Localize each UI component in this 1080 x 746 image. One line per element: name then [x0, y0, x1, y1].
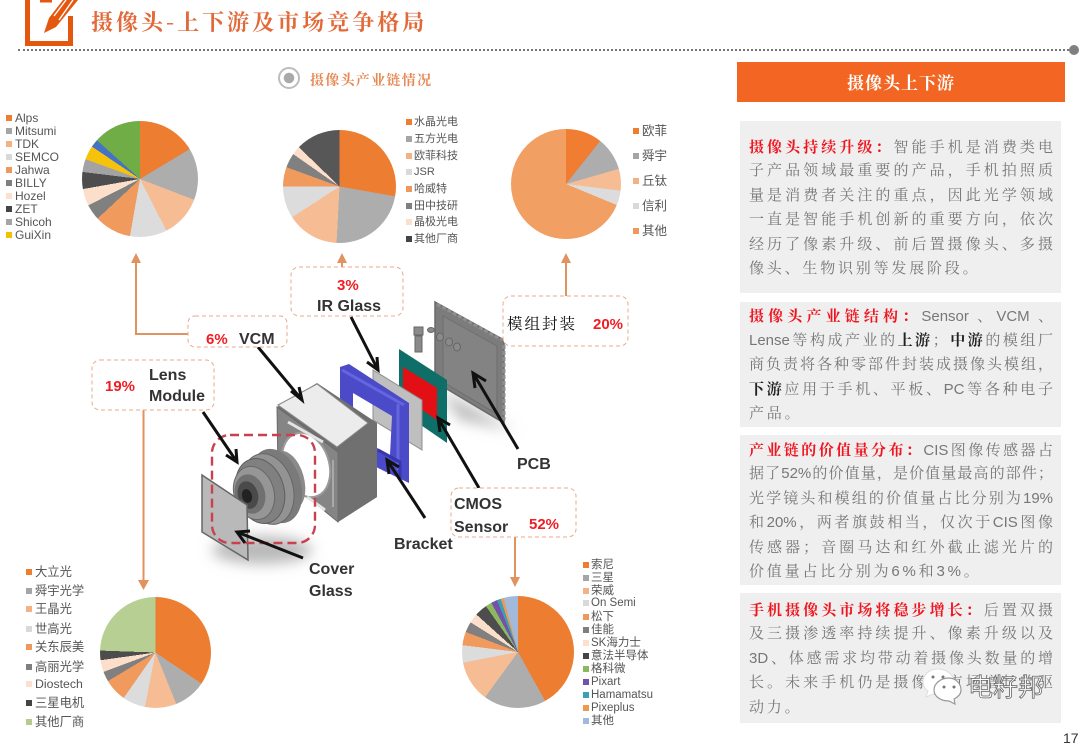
legend: VCM vendors: Mitsumi [15, 124, 56, 138]
legend: VCM vendors: Shicoh [15, 215, 52, 229]
legend: lens vendors: 关东辰美 [35, 640, 84, 654]
bracket [340, 364, 409, 483]
text panel: market growth: 3D、体感需求均带动着摄像头数量的增 [749, 650, 1053, 667]
watermark: brand name: 电籽邦 [968, 668, 1043, 704]
legend: CMOS vendors: 佳能 [591, 624, 614, 636]
callout: CMOS Sensor 52% [451, 488, 576, 537]
legend: lens vendors: 大立光 [35, 565, 72, 579]
text panel: market growth: 长。未来手机仍是摄像头市场增长的驱 [749, 674, 1053, 691]
page number: 17 [1063, 730, 1079, 746]
text panel: camera upgrades: 像头、生物识别等发展阶段。 [749, 260, 980, 277]
label: Cover Glass [309, 561, 354, 600]
pie chart: lens vendors [100, 597, 211, 708]
IR glass filter [373, 370, 422, 450]
small sensor components [414, 327, 460, 352]
legend: CMOS vendors: 松下 [591, 611, 614, 623]
legend: IR glass vendors: 晶极光电 [414, 216, 458, 228]
subtitle radio icon [278, 67, 300, 89]
text panel: market growth: 动力。 [749, 699, 802, 716]
text panel: camera upgrades: 子产品领域最重要的产品，手机拍照质 [749, 162, 1053, 179]
callout: IR Glass 3%: 3% [337, 277, 359, 294]
lens [227, 443, 312, 530]
label: Bracket: Bracket [394, 536, 453, 553]
legend: IR glass vendors: 其他厂商 [414, 233, 458, 245]
legend: VCM vendors: ZET [15, 202, 38, 216]
callout: Lens Module 19%: Module [149, 388, 205, 405]
text panel: camera upgrades: 一直是智能手机创新的重要方向，依次 [749, 211, 1053, 228]
text panel: value distribution: 和20%，两者旗鼓相当，仅次于CIS图像 [749, 514, 1053, 531]
callout: VCM 6%: 6% [206, 331, 228, 348]
legend: CMOS vendors: 三星 [591, 572, 614, 584]
legend: module packaging vendors: 丘钛 [642, 174, 667, 188]
text panel: camera upgrades: 量是消费者关注的重点，因此光学领域 [749, 187, 1053, 204]
legend: CMOS vendors: Pixeplus [591, 702, 634, 714]
text panel: value distribution: 价值量占比分别为6%和3%。 [749, 563, 982, 580]
callout: IR Glass 3%: IR Glass [317, 298, 381, 315]
legend: module packaging vendors: 欧菲 [642, 124, 667, 138]
pie chart: IR glass vendors [283, 130, 396, 243]
title: 摄像头-上下游及市场竞争格局 [91, 6, 427, 37]
header icon: pencil and square [25, 0, 78, 46]
legend: CMOS vendors: 索尼 [591, 559, 614, 571]
text panel: industry chain structure: Lense等构成产业的上游；中游的模组厂 [749, 329, 1053, 350]
callout: CMOS Sensor 52%: 52% [529, 516, 559, 533]
text panel: industry chain structure: 商负责将各种零部件封装成摄像头模组， [749, 356, 1053, 373]
right panel header: 摄像头上下游 [847, 69, 955, 94]
PCB board [435, 302, 504, 423]
legend: CMOS vendors [583, 558, 653, 727]
callout: Lens Module 19% [92, 360, 214, 410]
legend: VCM vendors: SEMCO [15, 150, 59, 164]
legend: IR glass vendors: 哈威特 [414, 183, 447, 195]
legend: module packaging vendors: 舜宇 [642, 149, 667, 163]
header end dot [1069, 45, 1079, 55]
legend: VCM vendors: BILLY [15, 176, 47, 190]
legend: CMOS vendors: 格科微 [591, 663, 626, 675]
legend: lens vendors: 舜宇光学 [35, 584, 84, 598]
legend: VCM vendors: TDK [15, 137, 39, 151]
text panel: camera upgrades: 摄像头持续升级：智能手机是消费类电 [749, 136, 1053, 157]
callout: VCM 6% [188, 316, 287, 348]
text panel: camera upgrades: 经历了像素升级、前后置摄像头、多摄 [749, 236, 1053, 253]
subtitle: 摄像头产业链情况 [310, 70, 432, 90]
label: PCB: PCB [517, 456, 551, 473]
legend: VCM vendors: Jahwa [15, 163, 50, 177]
legend: module packaging vendors: 信利 [642, 199, 667, 213]
callout: CMOS Sensor 52%: CMOS [454, 496, 502, 513]
callout: module packaging 20% [503, 296, 628, 346]
legend: CMOS vendors: SK海力士 [591, 637, 641, 649]
legend: CMOS vendors: Hamamatsu [591, 689, 653, 701]
callout: Lens Module 19%: 19% [105, 378, 135, 395]
legend: module packaging vendors: 其他 [642, 224, 667, 238]
text panel: industry chain structure [740, 302, 1061, 427]
right panel header [737, 62, 1065, 102]
component shadows [212, 390, 515, 564]
legend: VCM vendors: Alps [15, 111, 38, 125]
legend: IR glass vendors [406, 116, 458, 245]
legend: lens vendors: 世高光 [35, 622, 72, 636]
legend: lens vendors: 三星电机 [35, 696, 84, 710]
callout: module packaging 20%: 模组封装 [507, 312, 577, 334]
pie chart: VCM vendors [82, 121, 198, 237]
text panel: value distribution: 产业链的价值量分布：CIS图像传感器占 [749, 439, 1053, 460]
text panel: market growth [740, 593, 1061, 723]
callout: CMOS Sensor 52%: Sensor [454, 519, 508, 536]
text panel: value distribution: 据了52%的价值量，是价值量最高的部件； [749, 465, 1053, 482]
text panel: market growth: 手机摄像头市场将稳步增长：后置双摄 [749, 599, 1053, 620]
legend: VCM vendors: Hozel [15, 189, 46, 203]
text panel: value distribution: 传感器；音圈马达和红外截止滤光片的 [749, 539, 1053, 556]
label: Cover Glass: Glass [309, 583, 353, 600]
legend: CMOS vendors: 荣威 [591, 585, 614, 597]
legend: IR glass vendors: 五方光电 [414, 133, 458, 145]
callout: VCM 6%: VCM [239, 331, 275, 348]
VCM housing [274, 383, 377, 522]
text panel: industry chain structure: 下游应用于手机、平板、PC等各种电子 [749, 378, 1053, 399]
legend: CMOS vendors: 其他 [591, 715, 614, 727]
header dotted divider [18, 49, 1073, 51]
legend: lens vendors: Diostech [35, 677, 83, 691]
legend: VCM vendors [6, 111, 59, 242]
legend: IR glass vendors: 水晶光电 [414, 116, 458, 128]
legend: VCM vendors: GuiXin [15, 228, 51, 242]
legend: CMOS vendors: On Semi [591, 597, 636, 609]
legend: lens vendors: 其他厂商 [35, 715, 84, 729]
text panel: industry chain structure: 产品。 [749, 405, 802, 422]
legend: lens vendors [26, 565, 84, 729]
orange connector arrows [131, 253, 571, 590]
watermark: WeChat icon [922, 668, 962, 705]
callout: module packaging 20%: 20% [593, 316, 623, 333]
pie chart: module packaging vendors [511, 129, 621, 239]
legend: IR glass vendors: JSR [414, 166, 435, 178]
label: Cover Glass: Cover [309, 561, 354, 578]
legend: IR glass vendors: 田中技研 [414, 200, 458, 212]
lens module dashed highlight [212, 435, 315, 543]
legend: lens vendors: 高丽光学 [35, 660, 84, 674]
legend: IR glass vendors: 欧菲科技 [414, 150, 458, 162]
cover glass [202, 475, 248, 560]
callout: IR Glass 3% [291, 267, 403, 316]
legend: module packaging vendors [633, 124, 667, 238]
pie chart: CMOS vendors [462, 596, 574, 708]
text panel: value distribution: 光学镜头和模组的价值量占比分别为19% [749, 490, 1053, 507]
text panel: value distribution [740, 435, 1061, 585]
legend: lens vendors: 王晶光 [35, 602, 72, 616]
callout: Lens Module 19%: Lens [149, 367, 186, 384]
legend: CMOS vendors: 意法半导体 [591, 650, 648, 662]
CMOS sensor [399, 349, 447, 443]
text panel: industry chain structure: 摄像头产业链结构：Sensor 、VCM 、 [749, 305, 1053, 326]
pointer arrows [203, 317, 518, 558]
text panel: camera upgrades [740, 121, 1061, 293]
text panel: market growth: 及三摄渗透率持续提升、像素升级以及 [749, 625, 1053, 642]
legend: CMOS vendors: Pixart [591, 676, 620, 688]
